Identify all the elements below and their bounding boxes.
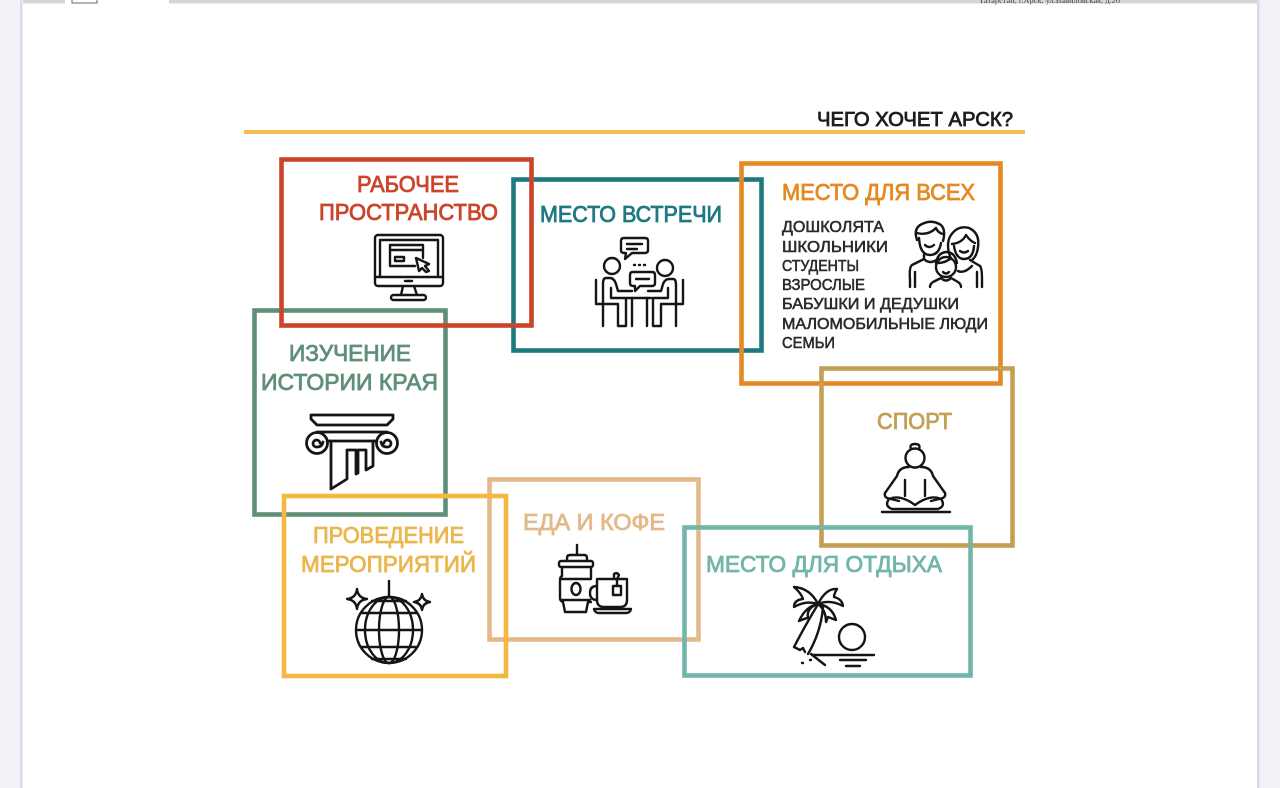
- panel: mint frame: [684, 528, 970, 676]
- heading: events: МЕРОПРИЯТИЙ: [301, 550, 476, 577]
- panel: red frame: [282, 160, 532, 326]
- top page strip: [23, 0, 1257, 5]
- heading: meeting place: МЕСТО ВСТРЕЧИ: [540, 201, 722, 227]
- heading: events: [301, 522, 476, 577]
- panel: orange frame: [742, 164, 1000, 384]
- list of visitor groups: СЕМЬИ: [782, 335, 835, 352]
- panel: green frame: [254, 310, 446, 514]
- heading: place to relax: МЕСТО ДЛЯ ОТДЫХА: [706, 551, 943, 577]
- icon: palm and sunset: [794, 587, 874, 666]
- heading: workspace: [319, 171, 498, 225]
- title: ЧЕГО ХОЧЕТ АРСК?: [817, 109, 1013, 131]
- icon: broken column: [306, 415, 398, 489]
- panel: teal frame: [514, 180, 762, 350]
- title underline: [244, 130, 1025, 134]
- icon: people at table: [596, 238, 683, 326]
- heading: events: ПРОВЕДЕНИЕ: [313, 522, 464, 548]
- heading: local history: ИЗУЧЕНИЕ: [289, 340, 411, 366]
- heading: sport: СПОРТ: [877, 408, 952, 434]
- list of visitor groups: СТУДЕНТЫ: [782, 258, 859, 275]
- heading: food and coffee: ЕДА И КОФЕ: [523, 509, 665, 535]
- list of visitor groups: ВЗРОСЛЫЕ: [782, 277, 865, 294]
- icon: coffee cups: [559, 545, 631, 613]
- list of visitor groups: ШКОЛЬНИКИ: [782, 239, 888, 256]
- panel: yellow frame: [284, 496, 506, 676]
- heading: workspace: ПРОСТРАНСТВО: [319, 199, 498, 225]
- icon: family: [910, 222, 982, 287]
- icon: computer monitor: [375, 235, 443, 300]
- heading: workspace: РАБОЧЕЕ: [357, 171, 459, 197]
- icon: person meditating: [882, 444, 950, 512]
- heading: local history: ИСТОРИИ КРАЯ: [261, 369, 438, 395]
- heading: local history: [261, 340, 438, 395]
- list of visitor groups: ДОШКОЛЯТА: [782, 219, 885, 236]
- list of visitor groups: МАЛОМОБИЛЬНЫЕ ЛЮДИ: [782, 316, 988, 333]
- list of visitor groups: [782, 219, 988, 352]
- panel: peach frame: [490, 480, 698, 640]
- list of visitor groups: БАБУШКИ И ДЕДУШКИ: [782, 296, 959, 313]
- icon: disco ball: [347, 581, 430, 663]
- panel: sport frame: [822, 368, 1012, 546]
- heading: place for everyone: МЕСТО ДЛЯ ВСЕХ: [782, 179, 975, 205]
